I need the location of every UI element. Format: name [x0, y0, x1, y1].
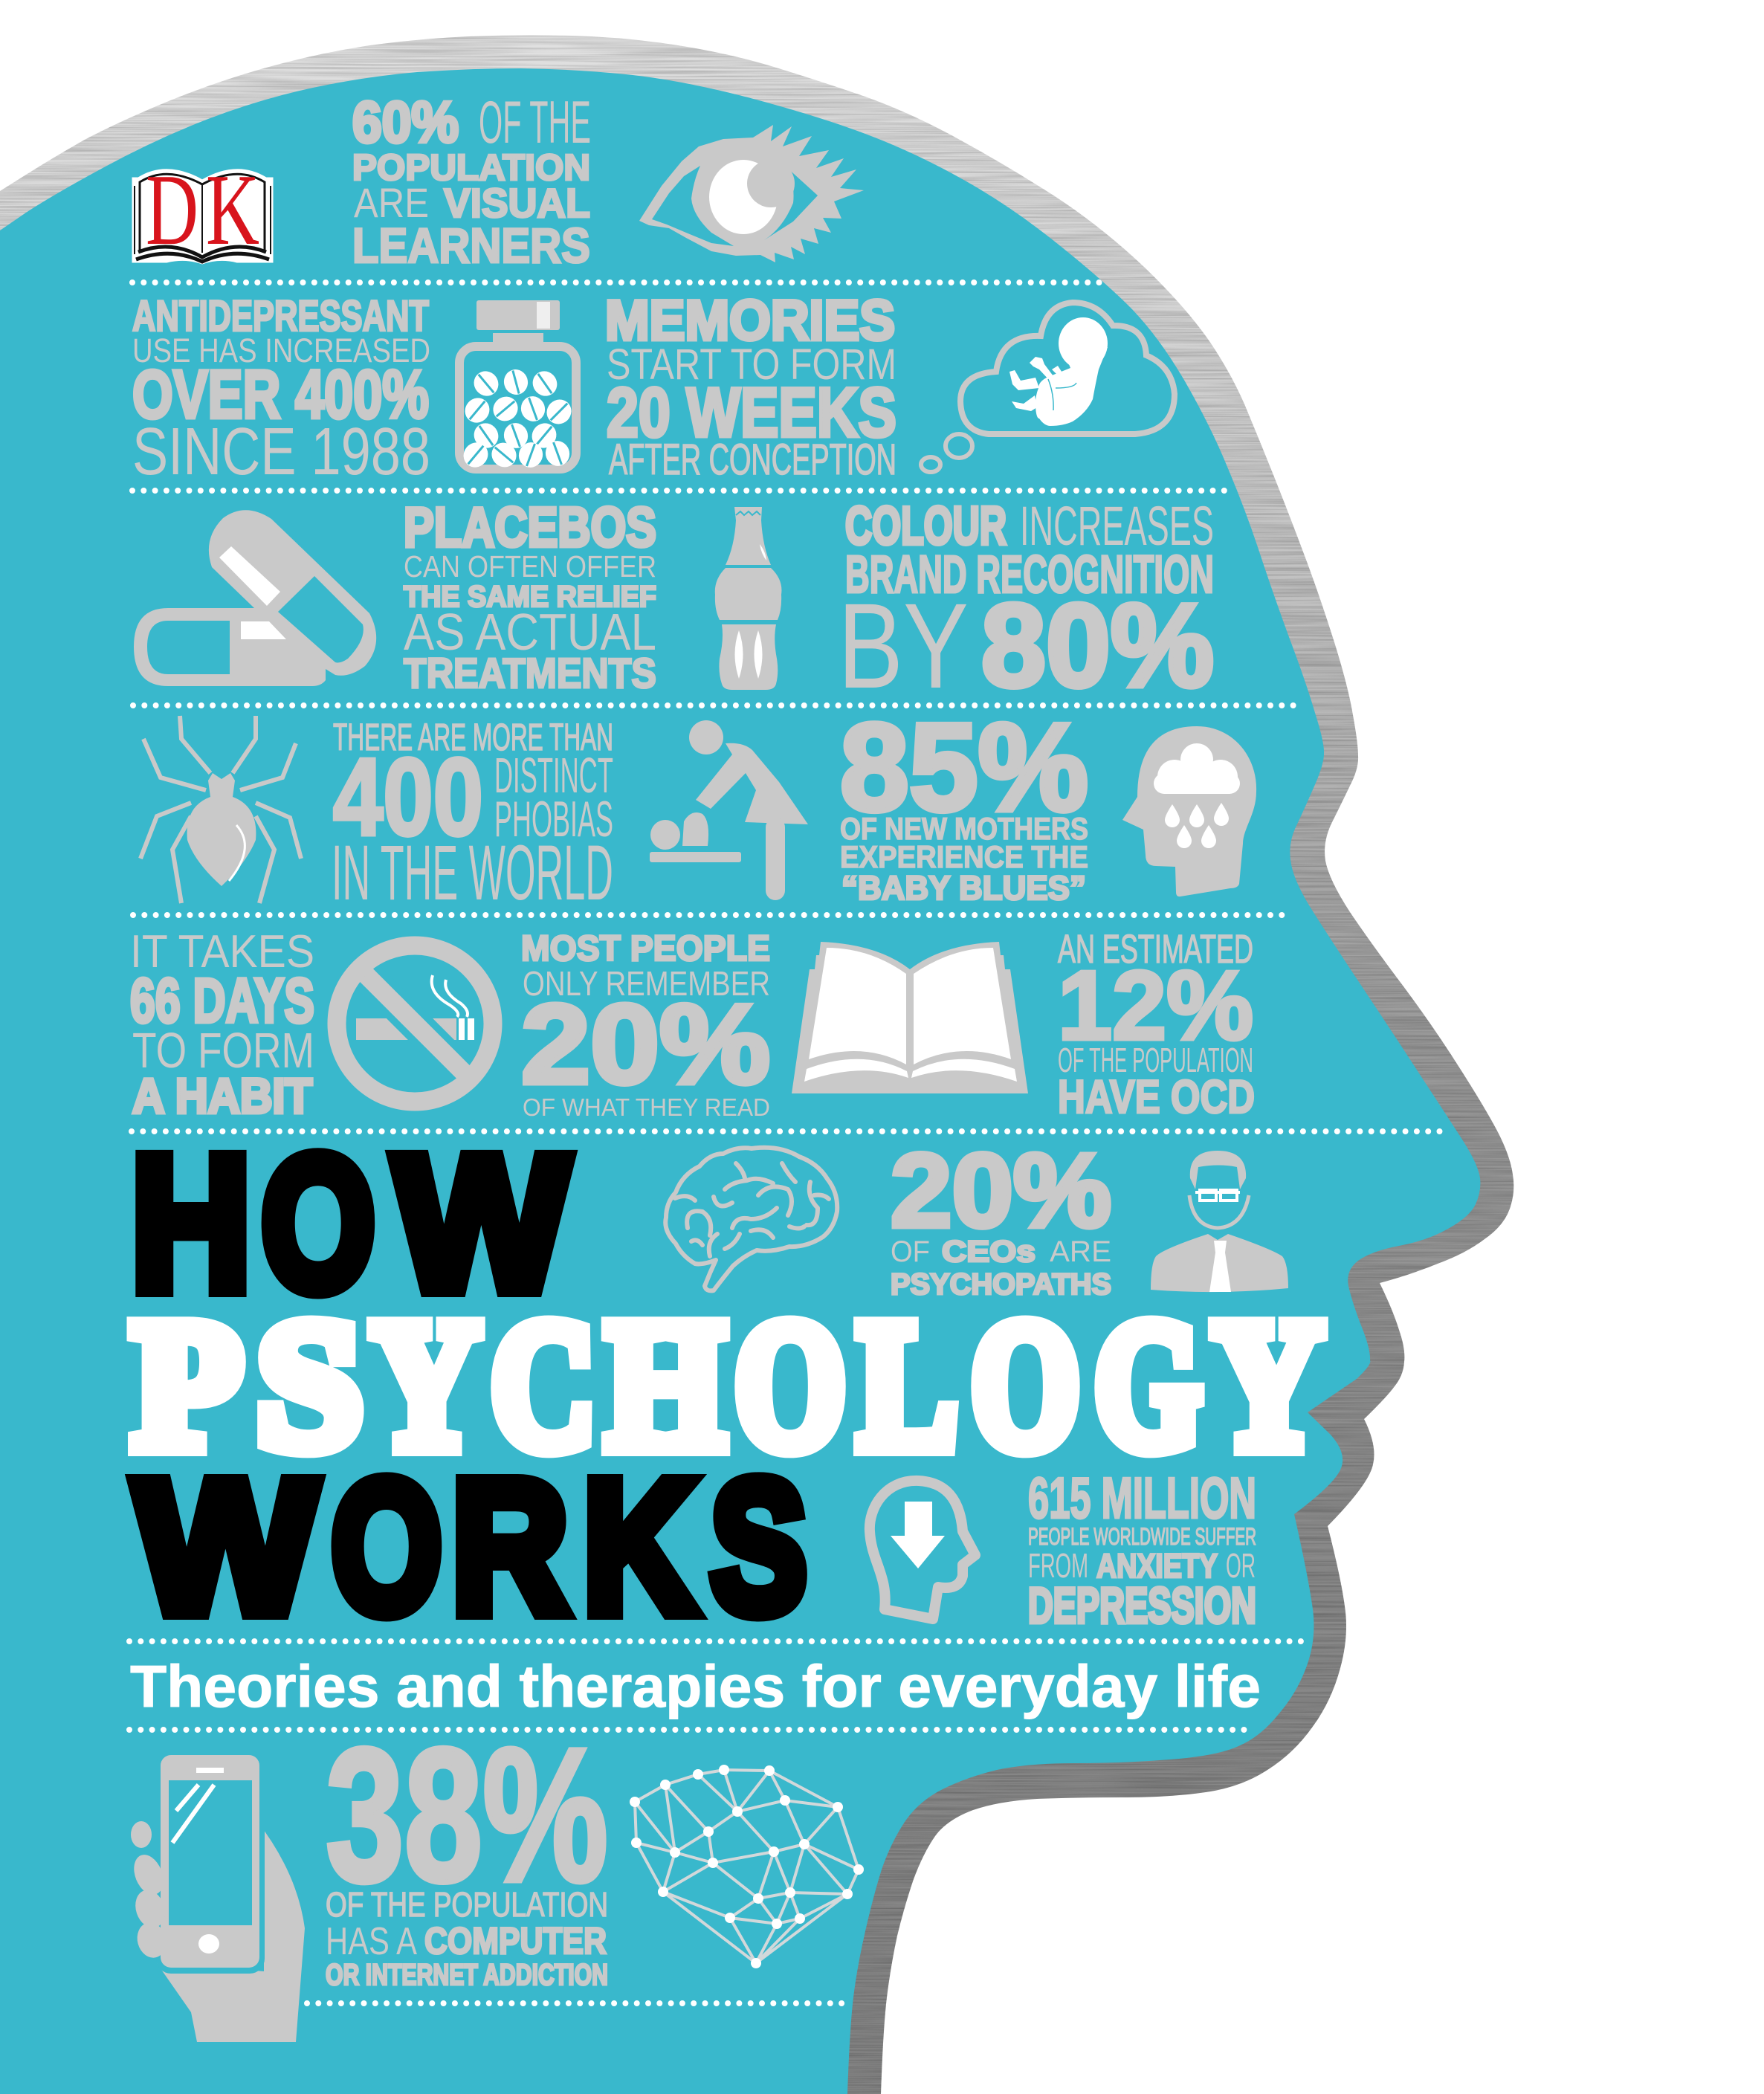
text block: CEOs: 20%	[891, 1131, 1111, 1249]
text block: CEOs: OF	[891, 1235, 930, 1268]
icon: no smoking	[337, 946, 493, 1102]
heading word: HOW: H	[132, 1117, 251, 1330]
heading word: WORKS: W	[135, 1441, 316, 1652]
icon: mother changing baby	[650, 720, 808, 900]
text block: 66 days: A HABIT	[132, 1068, 312, 1123]
text block: phobias: PHOBIAS	[494, 791, 613, 847]
text block: placebos: AS ACTUAL	[404, 603, 656, 661]
text block: colour: BRAND RECOGNITION	[845, 546, 1214, 604]
text block: colour: COLOUR	[845, 497, 1007, 556]
heading word: HOW	[132, 1117, 568, 1330]
text block: 66 days: 66 DAYS	[130, 966, 314, 1035]
text block: CEOs	[891, 1131, 1111, 1301]
text block: memories	[605, 289, 896, 484]
icon: DK logo: D	[146, 153, 198, 266]
text block: computer addiction: HAS A	[326, 1920, 417, 1963]
text block: memories: AFTER CONCEPTION	[609, 436, 896, 484]
text block: 66 days	[130, 926, 314, 1123]
icon: CEO	[1151, 1151, 1288, 1292]
heading word: WORKS: S	[711, 1441, 807, 1652]
heading word: PSYCHOLOGY: Y	[1213, 1284, 1323, 1487]
text block: phobias: THERE ARE MORE THAN	[333, 716, 613, 758]
text block: OCD: 12%	[1058, 951, 1253, 1060]
heading word: WORKS: K	[584, 1441, 696, 1652]
heading word: WORKS: R	[452, 1441, 568, 1652]
text block: antidepressant: ANTIDEPRESSANT	[132, 292, 429, 340]
text block: computer addiction: OF THE POPULATION	[326, 1885, 608, 1924]
text block: anxiety and depression: OR	[1226, 1546, 1256, 1585]
text block: 60% visual learners: 60%	[352, 89, 459, 155]
text block: 20% remember: MOST PEOPLE	[521, 929, 770, 969]
text block: OCD: AN ESTIMATED	[1058, 927, 1253, 972]
text block: 60% visual learners: POPULATION	[352, 148, 590, 188]
heading word: HOW: W	[395, 1117, 568, 1330]
text block: anxiety and depression: 615 MILLION	[1028, 1465, 1256, 1531]
text block: anxiety and depression: ANXIETY	[1096, 1547, 1218, 1585]
text block: CEOs: PSYCHOPATHS	[891, 1268, 1111, 1301]
text block: placebos: THE SAME RELIEF	[404, 581, 656, 613]
text block: 20% remember	[521, 929, 770, 1121]
text block: colour: INCREASES	[1020, 495, 1214, 557]
text block: placebos: TREATMENTS	[404, 650, 656, 697]
text block: baby blues: 85%	[840, 697, 1088, 837]
text block: OCD	[1058, 927, 1255, 1123]
text block: memories: START TO FORM	[607, 340, 896, 389]
text block: anxiety and depression: FROM	[1028, 1546, 1088, 1585]
text block: computer addiction	[326, 1709, 608, 1991]
text block: computer addiction: COMPUTER	[424, 1920, 607, 1962]
heading word: PSYCHOLOGY: L	[859, 1284, 957, 1487]
text block: 60% visual learners: ARE	[354, 179, 429, 226]
icon: hand holding phone	[129, 1751, 305, 2042]
text block: colour: 80%	[981, 579, 1214, 711]
heading word: PSYCHOLOGY	[133, 1284, 1323, 1487]
text block: anxiety and depression: DEPRESSION	[1028, 1577, 1256, 1634]
text block: phobias	[332, 716, 613, 917]
text block: CEOs: ARE	[1050, 1235, 1111, 1268]
text block: baby blues: “BABY BLUES”	[841, 869, 1086, 907]
heading word: PSYCHOLOGY: H	[607, 1284, 725, 1487]
icon: capsules	[134, 510, 376, 686]
heading word: WORKS	[135, 1441, 807, 1652]
text block: 60% visual learners: VISUAL	[444, 180, 590, 226]
text block: colour	[838, 495, 1214, 714]
text block: baby blues	[840, 697, 1088, 907]
icon: open book	[792, 942, 1028, 1093]
text block: OCD: OF THE POPULATION	[1058, 1041, 1253, 1079]
text block: 60% visual learners	[352, 89, 591, 273]
icon: head with down arrow	[870, 1481, 975, 1619]
text block: 60% visual learners: LEARNERS	[352, 218, 590, 273]
text block: anxiety and depression	[1028, 1465, 1256, 1634]
text block: 60% visual learners: OF THE	[479, 89, 591, 156]
icon: spider	[140, 716, 301, 903]
text block: antidepressant: USE HAS INCREASED	[132, 332, 430, 369]
text: IN THE WORLD	[332, 830, 613, 917]
heading word: PSYCHOLOGY: O	[972, 1284, 1079, 1487]
text block: antidepressant: SINCE 1988	[132, 415, 430, 489]
heading word: PSYCHOLOGY: S	[257, 1284, 362, 1487]
heading word: PSYCHOLOGY: P	[133, 1284, 242, 1487]
icon: brain	[665, 1148, 837, 1290]
text block: 20% remember: 20%	[521, 981, 770, 1108]
text block: placebos: PLACEBOS	[404, 496, 656, 558]
heading word: PSYCHOLOGY: G	[1095, 1284, 1201, 1487]
icon: fetus in thought cloud	[921, 303, 1175, 472]
icon: DK logo: K	[206, 153, 259, 266]
icon: pill jar	[459, 300, 576, 472]
text block: baby blues: OF NEW MOTHERS	[840, 811, 1088, 846]
heading word: HOW: O	[262, 1117, 375, 1330]
text block: colour: BY	[838, 578, 969, 714]
text block: OCD: HAVE OCD	[1058, 1071, 1255, 1123]
text block: phobias: DISTINCT	[494, 748, 613, 804]
icon: DK logo	[133, 153, 272, 266]
text block: 20% remember: OF WHAT THEY READ	[523, 1093, 770, 1121]
text block: computer addiction: 38%	[326, 1709, 608, 1922]
text block: antidepressant: OVER 400%	[132, 357, 429, 433]
heading word: PSYCHOLOGY: O	[735, 1284, 845, 1487]
text block: baby blues: EXPERIENCE THE	[840, 839, 1088, 874]
heading word: PSYCHOLOGY: Y	[372, 1284, 480, 1487]
text block: 20% remember: ONLY REMEMBER	[523, 964, 770, 1003]
text block: computer addiction: OR INTERNET ADDICTION	[326, 1959, 608, 1991]
icon: eye	[639, 125, 864, 262]
text block: placebos: CAN OFTEN OFFER	[404, 549, 656, 584]
text block: memories: MEMORIES	[605, 289, 895, 352]
text block: placebos	[404, 496, 656, 697]
text block: 66 days: TO FORM	[132, 1023, 314, 1079]
text block: 66 days: IT TAKES	[130, 926, 314, 977]
title: How Psychology Works	[132, 1117, 1323, 1652]
text block: antidepressant	[132, 292, 430, 489]
subtitle: Theories and therapies for everyday life	[130, 1653, 1261, 1719]
heading word: PSYCHOLOGY: C	[491, 1284, 595, 1487]
icon: soda bottle	[715, 507, 781, 690]
heading word: WORKS: O	[332, 1441, 442, 1652]
text block: phobias: 400	[333, 736, 483, 859]
text block: memories: 20 WEEKS	[607, 373, 896, 451]
text block: anxiety and depression: PEOPLE WORLDWIDE SUFFER	[1028, 1523, 1256, 1550]
text block: CEOs: CEOs	[942, 1235, 1036, 1268]
icon: head with rain cloud	[1122, 726, 1256, 896]
icon: network brain	[630, 1765, 864, 1968]
